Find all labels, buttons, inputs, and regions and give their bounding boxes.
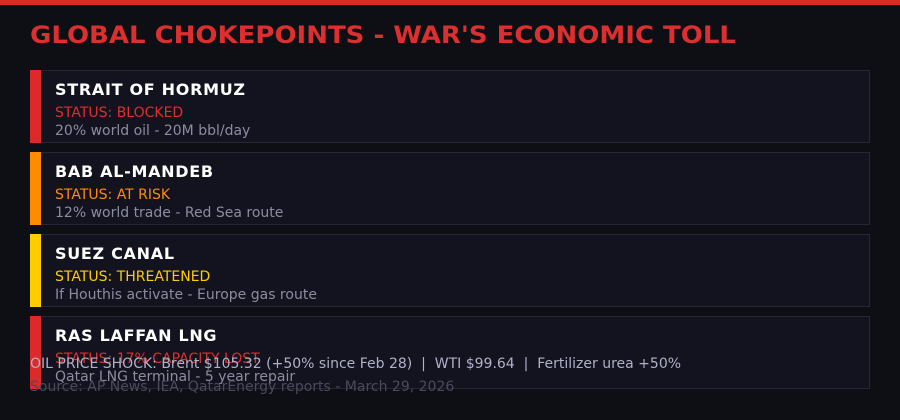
panel: Bab al-Mandeb: BAB AL-MANDEB: [55, 162, 214, 181]
panel: Ras Laffan LNG: [30, 316, 870, 389]
panel: Suez Canal: [30, 234, 870, 307]
panel: Bab al-Mandeb: [30, 152, 870, 225]
panel: Suez Canal: STATUS: THREATENED: [55, 269, 210, 285]
panel: Bab al-Mandeb: 12% world trade - Red Sea route: [55, 205, 283, 221]
panel: Ras Laffan LNG: RAS LAFFAN LNG: [55, 326, 217, 345]
panel: Suez Canal: SUEZ CANAL: [55, 244, 175, 263]
panel: Strait of Hormuz: STATUS: BLOCKED: [55, 105, 183, 121]
panel: Strait of Hormuz: [30, 70, 870, 143]
source line: Source: AP News, IEA, QatarEnergy reports - March 29, 2026: [30, 379, 454, 395]
panel: Ras Laffan LNG: STATUS: 17% CAPACITY LOST: [55, 351, 260, 367]
panel: Strait of Hormuz: 20% world oil - 20M bbl/day: [55, 123, 250, 139]
panel: Bab al-Mandeb: STATUS: AT RISK: [55, 187, 171, 203]
panel: Suez Canal: If Houthis activate - Europe gas route: [55, 287, 317, 303]
oil price shock line: OIL PRICE SHOCK: Brent $105.32 (+50% since Feb 28) | WTI $99.64 | Fertilizer urea +50%: [30, 356, 681, 372]
panel: Strait of Hormuz: STRAIT OF HORMUZ: [55, 80, 246, 99]
panel: Ras Laffan LNG: Qatar LNG terminal - 5 year repair: [55, 369, 295, 385]
title: GLOBAL CHOKEPOINTS - WAR'S ECONOMIC TOLL: [30, 21, 736, 49]
top accent bar: [0, 0, 900, 5]
